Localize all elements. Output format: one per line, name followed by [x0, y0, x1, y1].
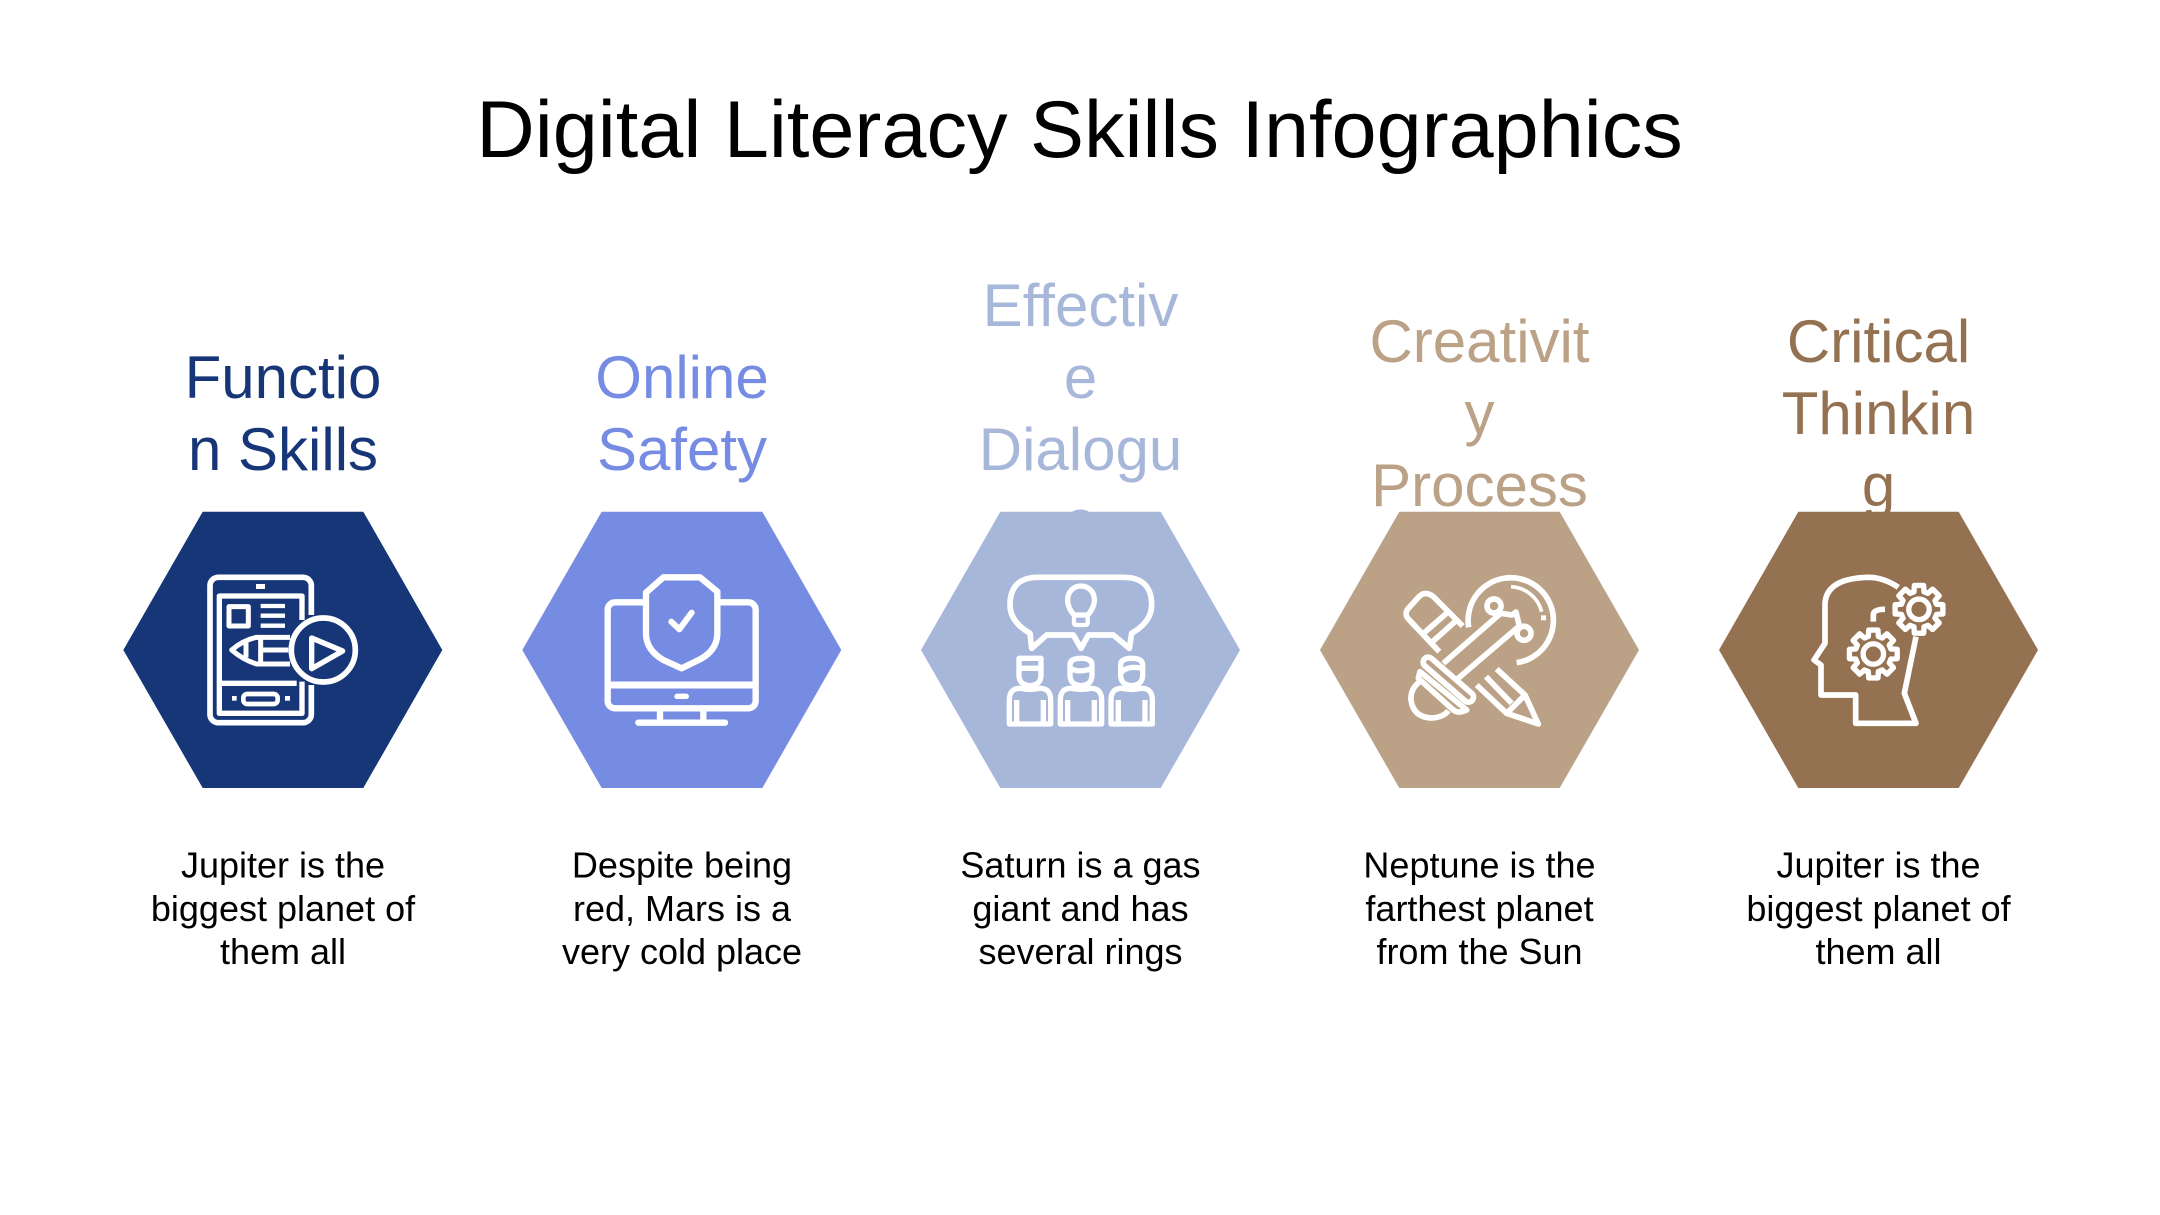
heading: Online Safety: Safety — [597, 416, 767, 483]
description: Function Skills: them all — [220, 931, 346, 972]
heading: Effective Dialogue: Dialogu — [979, 416, 1182, 483]
description: Online Safety — [562, 845, 802, 972]
heading: Function Skills: n Skills — [188, 416, 378, 483]
heading: Creativity Process: Process — [1371, 452, 1588, 519]
heading: Creativity Process — [1369, 308, 1590, 519]
heading: Effective Dialogue — [979, 272, 1182, 555]
heading: Effective Dialogue: Effectiv — [983, 272, 1178, 339]
description: Online Safety: red, Mars is a — [573, 888, 792, 929]
icon: head with gears — [1814, 577, 1943, 723]
icon: tablet with pencil and play button — [210, 577, 355, 723]
hexagon: Creativity Process — [1320, 512, 1639, 788]
description: Effective Dialogue: several rings — [978, 931, 1183, 972]
heading: Online Safety: Online — [595, 344, 769, 411]
heading: Creativity Process: Creativit — [1369, 308, 1590, 375]
description: Creativity Process: from the Sun — [1376, 931, 1583, 972]
description: Function Skills: Jupiter is the — [181, 845, 385, 886]
description: Online Safety: Despite being — [572, 845, 792, 886]
description: Creativity Process — [1363, 845, 1596, 972]
description: Function Skills: biggest planet of — [151, 888, 416, 929]
icon: lower gear — [1849, 630, 1897, 678]
description: Effective Dialogue — [960, 845, 1201, 972]
description: Function Skills — [151, 845, 416, 972]
description: Critical Thinking: Jupiter is the — [1776, 845, 1981, 886]
heading: Function Skills — [185, 344, 381, 483]
description: Creativity Process: Neptune is the — [1363, 845, 1596, 886]
icon: lightbulb crossed with pencil — [1406, 578, 1553, 724]
heading: Critical Thinking: g — [1862, 452, 1895, 519]
heading: Critical Thinking: Critical — [1787, 308, 1970, 375]
description: Critical Thinking — [1746, 845, 2012, 972]
hexagon: Critical Thinking — [1719, 512, 2038, 788]
heading: Creativity Process: y — [1464, 380, 1494, 447]
hexagon: Online Safety — [522, 512, 841, 788]
description: Effective Dialogue: giant and has — [972, 888, 1189, 929]
icon: team sharing an idea — [1009, 577, 1152, 724]
icon: upper gear — [1895, 585, 1943, 633]
heading: Effective Dialogue: e — [1064, 488, 1097, 555]
hexagon: Effective Dialogue — [921, 512, 1240, 788]
heading: Critical Thinking: Thinkin — [1782, 380, 1975, 447]
heading: Effective Dialogue: e — [1064, 344, 1097, 411]
heading: Function Skills: Functio — [185, 344, 381, 411]
description: Effective Dialogue: Saturn is a gas — [960, 845, 1201, 886]
description: Creativity Process: farthest planet — [1365, 888, 1594, 929]
description: Online Safety: very cold place — [562, 931, 802, 972]
title: Digital Literacy Skills Infographics — [476, 85, 1683, 175]
description: Critical Thinking: biggest planet of — [1746, 888, 2012, 929]
icon: monitor with shield — [608, 577, 756, 723]
heading: Critical Thinking — [1782, 308, 1975, 519]
description: Critical Thinking: them all — [1815, 931, 1942, 972]
heading: Online Safety — [595, 344, 769, 483]
hexagon: Function Skills — [123, 512, 442, 788]
